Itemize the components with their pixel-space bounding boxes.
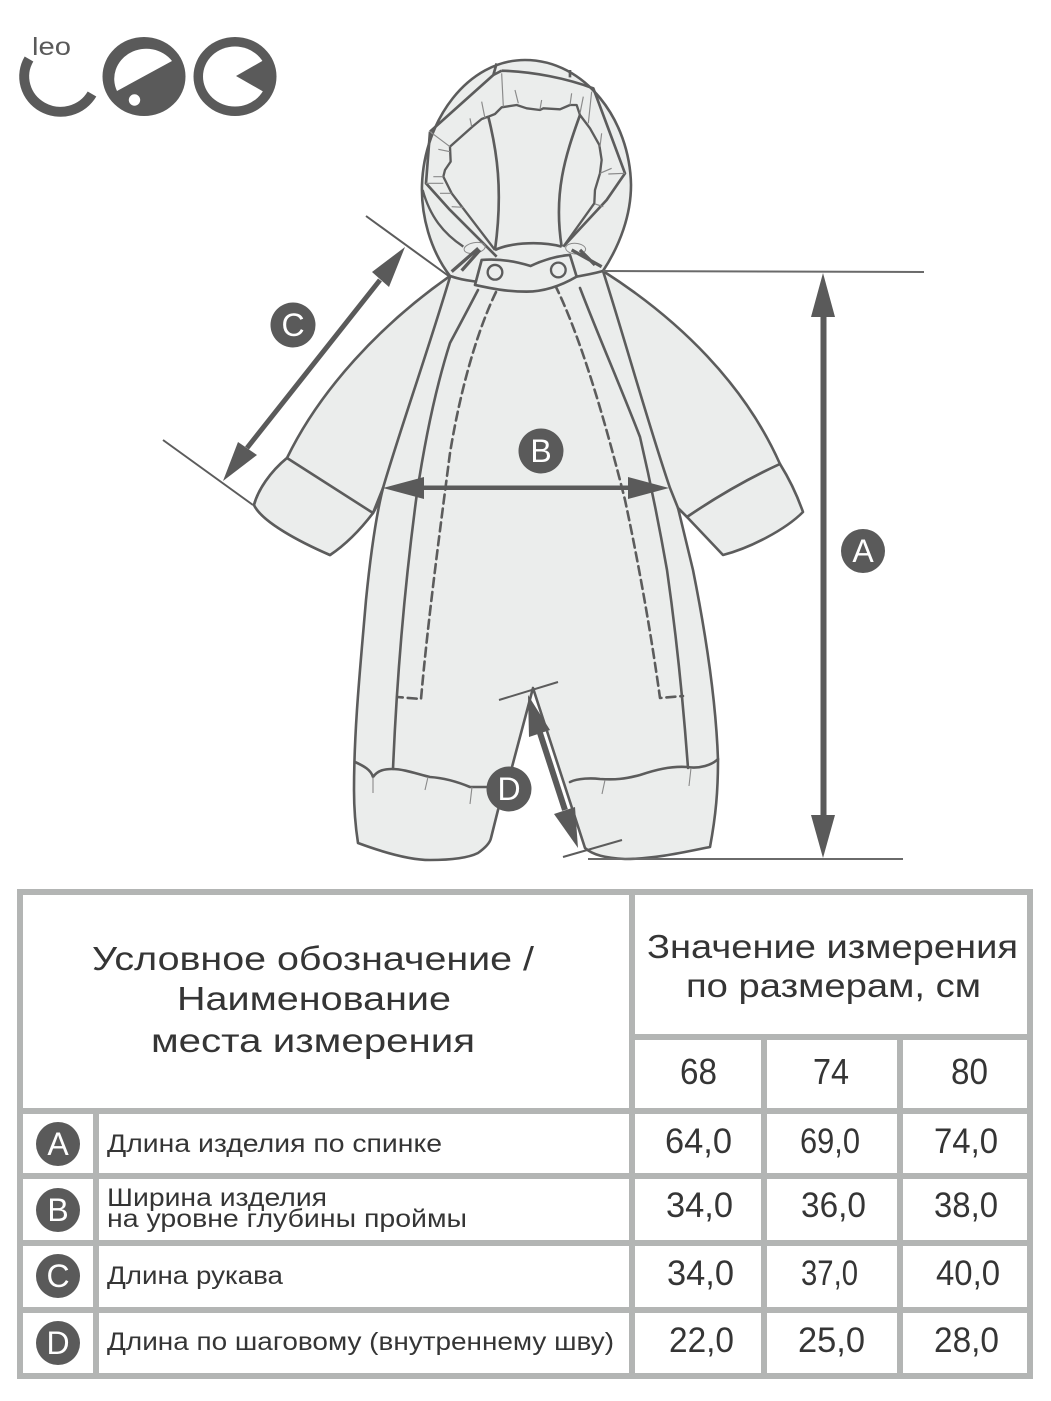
right leg cuff scallop bbox=[570, 759, 718, 782]
left inner placket line bbox=[393, 290, 478, 769]
header: measurement name bbox=[92, 940, 535, 1059]
row D bbox=[36, 1321, 999, 1365]
logo word: leo bbox=[32, 33, 71, 61]
collar snap left bbox=[488, 265, 502, 280]
suit body bbox=[254, 271, 780, 860]
cuff pleats bbox=[373, 768, 691, 804]
header: measurement values: Значение измерения bbox=[647, 928, 1018, 965]
measure C: sleeve length bbox=[163, 216, 450, 505]
logo arc bbox=[24, 59, 92, 112]
header: sizes: 68 bbox=[680, 1051, 717, 1092]
row C: Длина рукава bbox=[107, 1262, 283, 1290]
drawcord left bbox=[452, 248, 480, 272]
right sleeve seam bbox=[603, 271, 687, 517]
row B: 34,0 bbox=[666, 1186, 733, 1225]
right zip dashed line bbox=[555, 285, 683, 698]
eyelet right bbox=[565, 242, 586, 255]
row B: на уровне глубины проймы bbox=[107, 1205, 467, 1233]
hood face opening bbox=[426, 63, 625, 257]
left cuff bbox=[254, 458, 373, 555]
row A: A bbox=[47, 1126, 69, 1162]
garment illustration: snowsuit bbox=[254, 60, 803, 860]
row D: 22,0 bbox=[669, 1321, 734, 1360]
collar snap right bbox=[551, 263, 566, 277]
logo wedge circle bbox=[194, 37, 276, 116]
measure A: length bbox=[588, 271, 924, 859]
badge A: A bbox=[852, 533, 874, 569]
size table bbox=[17, 889, 1033, 1379]
row A: Длина изделия по спинке bbox=[107, 1130, 442, 1158]
badge C bbox=[270, 302, 316, 348]
hood centre panel lines bbox=[488, 115, 580, 250]
row A: 64,0 bbox=[665, 1122, 732, 1161]
row C: 34,0 bbox=[667, 1254, 734, 1293]
measure B: chest width bbox=[383, 428, 669, 499]
row C bbox=[36, 1254, 1000, 1298]
badge B bbox=[518, 428, 564, 474]
row A: 69,0 bbox=[800, 1122, 860, 1161]
ruff pleats bbox=[426, 73, 625, 207]
row A: 74,0 bbox=[934, 1122, 998, 1161]
body seams bbox=[373, 277, 450, 513]
logo half circle bbox=[102, 37, 186, 116]
collar bbox=[475, 255, 577, 292]
badge A bbox=[841, 529, 885, 573]
right cuff bbox=[687, 464, 803, 555]
header: measurement name: места измерения bbox=[151, 1022, 475, 1059]
row B: Ширина изделия bbox=[107, 1184, 327, 1212]
row C: 40,0 bbox=[936, 1254, 1000, 1293]
row D: 28,0 bbox=[934, 1321, 999, 1360]
header: measurement values bbox=[647, 928, 1018, 1004]
left zip dashed line bbox=[397, 292, 496, 699]
header: sizes: 74 bbox=[813, 1051, 849, 1092]
ruff inner edge bbox=[443, 105, 602, 250]
header: sizes bbox=[680, 1051, 988, 1092]
row D: 25,0 bbox=[798, 1321, 865, 1360]
drawcord right bbox=[572, 250, 602, 267]
header: measurement name: Наименование bbox=[177, 980, 451, 1017]
hood side line bbox=[423, 190, 463, 247]
hood bbox=[422, 60, 631, 300]
row A bbox=[36, 1122, 998, 1166]
row C: C bbox=[46, 1258, 70, 1294]
row D: D bbox=[46, 1325, 70, 1361]
row B: 36,0 bbox=[801, 1186, 866, 1225]
row D: Длина по шаговому (внутреннему шву) bbox=[107, 1328, 614, 1356]
right inner placket line bbox=[580, 288, 688, 768]
left leg cuff scallop bbox=[355, 762, 490, 787]
measure D: inseam bbox=[486, 682, 622, 857]
logo: leo bbox=[24, 33, 277, 116]
hood details bbox=[423, 63, 625, 292]
table grid bbox=[17, 889, 1033, 1379]
badge B: B bbox=[530, 433, 552, 469]
row C: 37,0 bbox=[801, 1254, 858, 1293]
badge D bbox=[486, 766, 532, 812]
badge D: D bbox=[497, 771, 521, 807]
row B: 38,0 bbox=[934, 1186, 998, 1225]
header: measurement name: Условное обозначение / bbox=[92, 940, 535, 977]
row B bbox=[36, 1184, 998, 1233]
badge C: C bbox=[281, 307, 305, 343]
eyelet left bbox=[463, 241, 486, 255]
header: measurement values: по размерам, см bbox=[686, 967, 981, 1004]
header: sizes: 80 bbox=[951, 1051, 988, 1092]
row B: B bbox=[47, 1192, 69, 1228]
